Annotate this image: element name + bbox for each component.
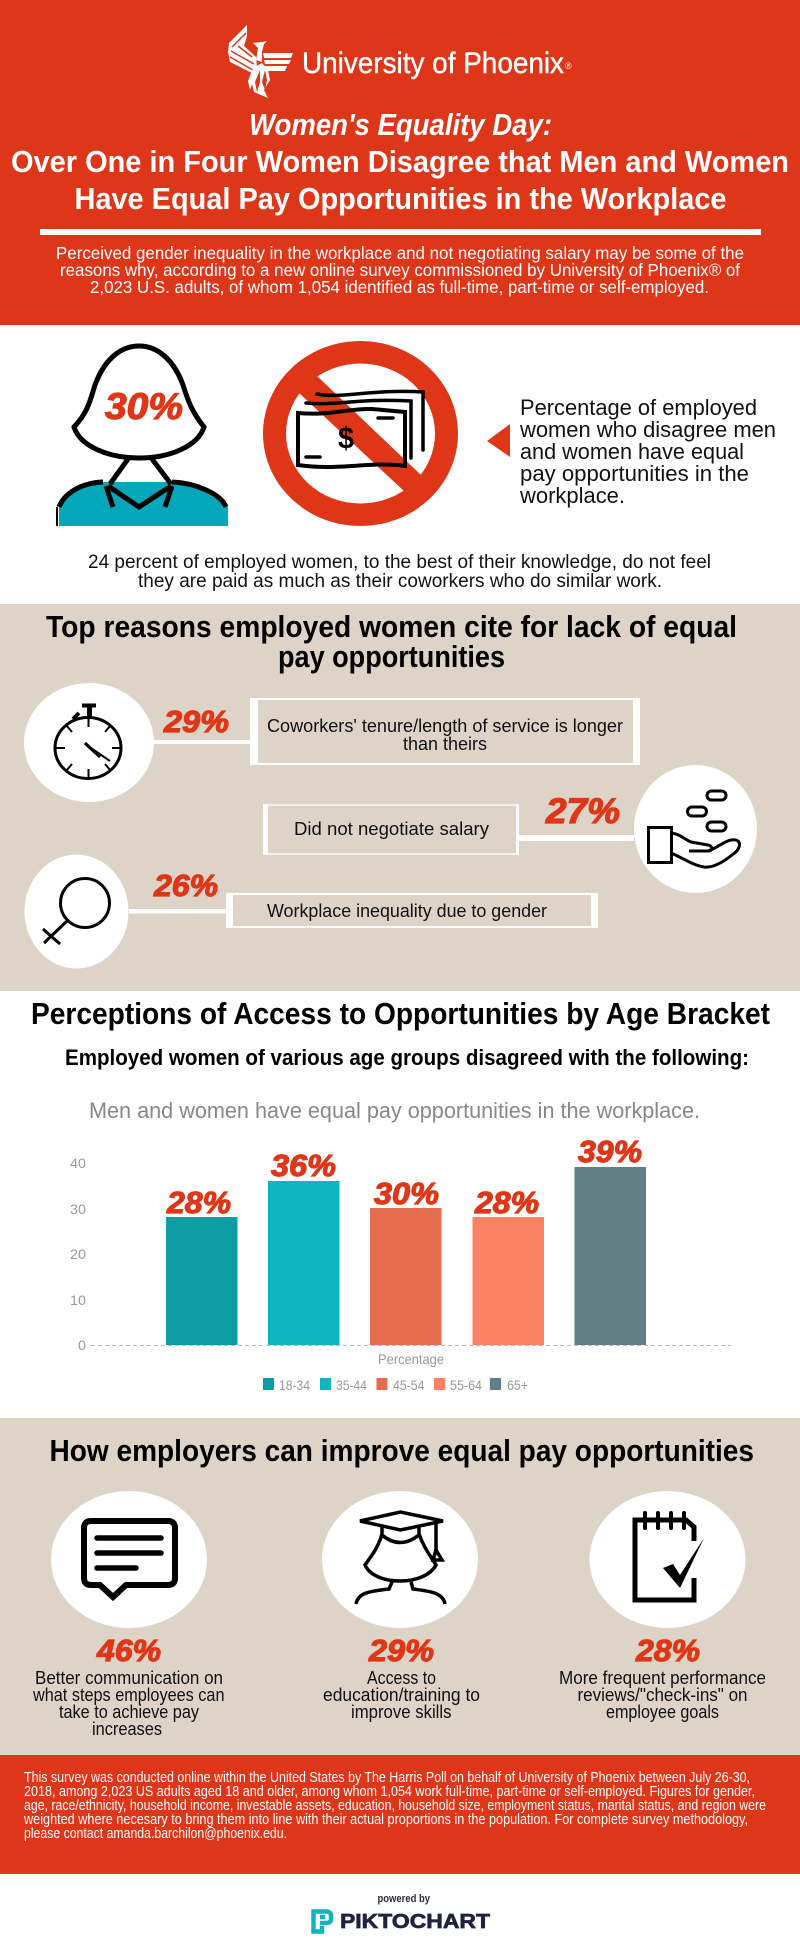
icon: speech bubble: [84, 1521, 175, 1597]
bar chart: 20: [70, 1246, 86, 1262]
bar chart: 28%: [166, 1185, 231, 1220]
callout text: pay opportunities in the: [520, 461, 749, 486]
reason 1: tenure: [24, 683, 640, 802]
logo wordmark: University of Phoenix: [302, 47, 564, 80]
subheading: Employed women of various age groups disagreed with the following:: [65, 1045, 749, 1070]
callout text: Percentage of employed: [520, 395, 757, 420]
panel: 30 percent: [0, 325, 800, 604]
legend: 45-54: [393, 1377, 425, 1393]
callout text: [519, 395, 776, 508]
callout text: and women have equal: [520, 439, 744, 464]
bar chart: 30%: [374, 1176, 439, 1211]
panel: powered by piktochart: [0, 1874, 800, 1954]
callout text: workplace.: [519, 483, 625, 508]
panel: age bracket: [0, 991, 800, 1418]
logo: University of Phoenix: [228, 25, 572, 98]
29%: 29%: [368, 1633, 434, 1668]
panel: how employers can improve: [0, 1418, 800, 1755]
legend: [263, 1377, 528, 1393]
heading: [46, 609, 737, 674]
piktochart wordmark: PIKTOCHART: [340, 1911, 490, 1933]
29%: 29%: [163, 704, 229, 739]
text: More frequent performance: [559, 1668, 766, 1688]
icon: stopwatch: [55, 706, 122, 778]
text: [323, 1668, 480, 1722]
icon: no money: $: [338, 420, 354, 455]
icon: notepad with check: [635, 1513, 704, 1600]
item: communication: [32, 1491, 224, 1739]
box: gender: Workplace inequality due to gender: [267, 901, 547, 921]
text: improve skills: [351, 1702, 452, 1722]
panel: methodology footer: [0, 1755, 800, 1874]
text: [32, 1668, 224, 1739]
24 percent text: [88, 551, 711, 592]
item: reviews: [559, 1491, 766, 1722]
icon: person with 30%: [56, 346, 228, 526]
chart title: Men and women have equal pay opportunities in the workplace.: [89, 1098, 700, 1123]
box: gender: [226, 893, 598, 928]
text: Access to: [367, 1668, 436, 1688]
text: [559, 1668, 766, 1722]
title: Have Equal Pay Opportunities in the Workplace: [74, 182, 726, 216]
24 percent text: they are paid as much as their coworkers who do similar work.: [138, 570, 662, 592]
box: tenure: Coworkers' tenure/length of service is longer: [267, 716, 623, 736]
icon: hand with coins: [648, 791, 739, 867]
30% label: 30%: [105, 386, 183, 427]
46%: 46%: [96, 1633, 161, 1668]
reason 3: gender: [24, 854, 598, 968]
bar chart: [70, 1134, 731, 1367]
icon: phoenix: [228, 25, 293, 98]
bar chart: 36%: [271, 1148, 336, 1183]
26%: 26%: [153, 868, 218, 903]
item: education: [322, 1491, 480, 1722]
callout text: women who disagree men: [519, 417, 776, 442]
heading: Top reasons employed women cite for lack of equal: [46, 609, 737, 644]
icon: graduate: [356, 1512, 445, 1604]
icon: piktochart logo: [314, 1912, 331, 1932]
legend: 65+: [507, 1377, 528, 1393]
bar chart: 28%: [474, 1185, 539, 1220]
panel: methodology footer: please contact amanda.barchilon@phoenix.edu.: [24, 1826, 287, 1842]
text: reviews/"check-ins" on: [578, 1685, 748, 1705]
heading: pay opportunities: [278, 639, 505, 674]
bar chart: 30: [70, 1201, 86, 1217]
text: take to achieve pay: [59, 1702, 199, 1722]
24 percent text: 24 percent of employed women, to the best of their knowledge, do not feel: [88, 551, 711, 573]
bar chart: 39%: [578, 1134, 642, 1169]
intro text: Perceived gender inequality in the workplace and not negotiating salary may be some of the: [56, 243, 744, 263]
text: employee goals: [606, 1702, 719, 1722]
intro text: 2,023 U.S. adults, of whom 1,054 identified as full-time, part-time or self-employed.: [90, 277, 709, 297]
legend: 18-34: [279, 1377, 310, 1393]
legend: 35-44: [336, 1377, 367, 1393]
icon: female symbol: [43, 878, 110, 944]
box: negotiate: Did not negotiate salary: [294, 819, 489, 839]
legend: 55-64: [450, 1377, 482, 1393]
bar chart: 40: [70, 1155, 86, 1171]
text: education/training to: [323, 1685, 480, 1705]
bar chart: 0: [78, 1337, 86, 1353]
bar chart: Percentage: [378, 1351, 444, 1367]
registered mark: ®: [565, 61, 572, 71]
title: Women's Equality Day:: [249, 108, 552, 142]
text: increases: [92, 1719, 162, 1739]
intro text: reasons why, according to a new online survey commissioned by University of Phoenix® of: [60, 260, 740, 280]
arrow: [487, 424, 510, 457]
27%: 27%: [545, 792, 620, 831]
panel: top reasons: [0, 604, 800, 991]
intro text: [56, 243, 744, 297]
title: [11, 108, 789, 216]
icon: no money: [263, 341, 458, 526]
box: tenure: [250, 698, 640, 765]
panel: header: [0, 0, 800, 325]
box: tenure: than theirs: [403, 734, 487, 754]
text: Better communication on: [35, 1668, 223, 1688]
powered by: powered by: [378, 1893, 431, 1905]
bar chart: 10: [70, 1292, 86, 1308]
reason 2: negotiate: [263, 765, 757, 893]
box: negotiate: [263, 804, 519, 855]
28%: 28%: [635, 1633, 700, 1668]
text: what steps employees can: [32, 1685, 224, 1705]
